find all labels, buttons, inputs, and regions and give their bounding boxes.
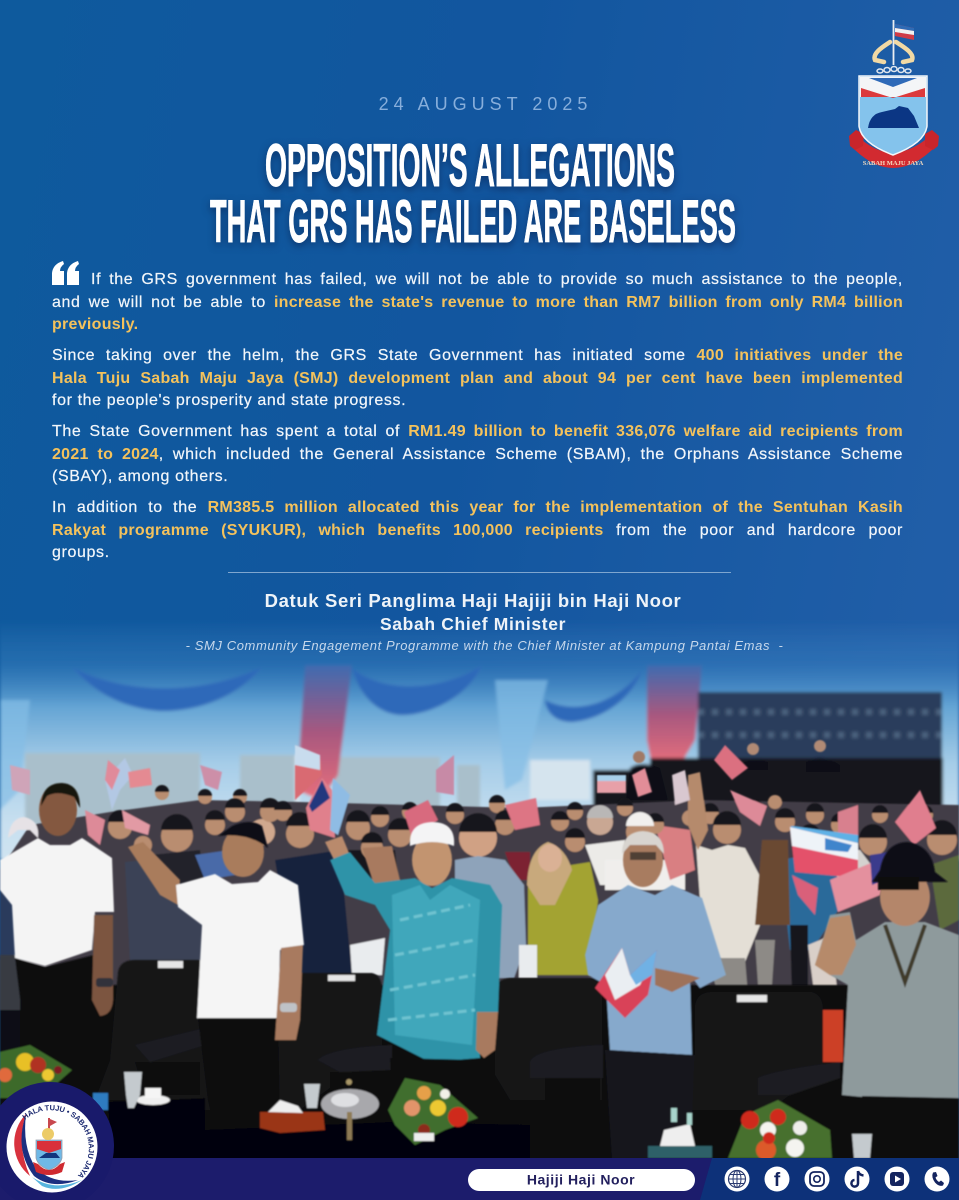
- silver food dish: [321, 1079, 379, 1140]
- icon: facebook: f: [774, 1170, 781, 1191]
- sofa armrests: [135, 1028, 840, 1095]
- stage performers: [626, 758, 840, 800]
- man at far left in white shirt: [0, 783, 114, 1065]
- icon: facebook: [764, 1166, 790, 1192]
- tissue box right: [648, 1108, 712, 1158]
- white tags on sofas: [158, 961, 767, 1002]
- quote body text: and we will not be able to increase the state's revenue to more than RM7 billion from only RM4 billion: [52, 294, 903, 311]
- quote body text: (SBAY), among others.: [52, 468, 228, 485]
- ribbon: SABAH MAJU JAYA: [863, 160, 924, 167]
- crowd clothing blocks: [0, 825, 959, 975]
- flag on pole: [893, 20, 914, 65]
- badge crest: [33, 1118, 65, 1175]
- wreath: [877, 66, 911, 73]
- quote body text: Hala Tuju Sabah Maju Jaya (SMJ) development plan and about 94 per cent have been implemented: [52, 370, 903, 387]
- Malaysian and Sabah flags: [10, 745, 936, 915]
- flower arrangement centre: [388, 1078, 478, 1145]
- crowd mass: [0, 800, 959, 1010]
- handle pill: Hajiji Haji Noor: [527, 1172, 635, 1188]
- badge: Hala Tuju Sabah Maju Jaya: [0, 1082, 114, 1192]
- saucer and cup: [136, 1088, 170, 1105]
- quote body text: [52, 271, 903, 561]
- Chief Minister in teal batik with white cap: [325, 822, 502, 1100]
- man in blue shirt holding flags: [585, 831, 726, 1158]
- badge: Hala Tuju Sabah Maju Jaya: HALA TUJU • SABAH MAJU JAYA: [22, 1105, 94, 1178]
- speaker position: Sabah Chief Minister: [380, 614, 566, 634]
- woman in white headscarf: [8, 817, 38, 838]
- black sofas: [95, 960, 823, 1110]
- photo: crowd waving flags at community programme: [0, 635, 959, 1158]
- quote body text: previously.: [52, 316, 138, 333]
- icon: tiktok: [844, 1166, 870, 1192]
- stage LED screen: [698, 692, 942, 760]
- state crest: [849, 20, 939, 168]
- badge ring text: [25, 1110, 89, 1177]
- blue drapes: [72, 665, 642, 722]
- quote body text: In addition to the RM385.5 million allocated this year for the implementation of the Sentuhan Kasih: [52, 499, 903, 516]
- curtains pink and pale: [297, 665, 352, 800]
- water glasses: [124, 1072, 872, 1158]
- grey building walls: [25, 753, 480, 825]
- handle pill: [468, 1169, 695, 1191]
- man at right with black hat and necklace: [815, 842, 959, 1158]
- event caption: - SMJ Community Engagement Programme with the Chief Minister at Kampung Pantai Emas -: [186, 638, 783, 653]
- quote body text: 2021 to 2024, which included the General Assistance Scheme (SBAM), the Orphans Assistance Scheme: [52, 446, 903, 463]
- tissue box: [260, 1100, 325, 1133]
- blue box: [93, 1093, 108, 1110]
- man behind in floral shirt with raised arm: [688, 772, 838, 1000]
- dark floor and tables base: [0, 985, 959, 1160]
- icon: website: [724, 1166, 750, 1192]
- icon: video: [884, 1166, 910, 1192]
- quote body text: groups.: [52, 544, 110, 561]
- black stage front: [593, 758, 943, 810]
- shield: [859, 76, 927, 155]
- footer bar: [0, 1158, 959, 1200]
- speaker name: Datuk Seri Panglima Haji Hajiji bin Haji Noor: [265, 590, 681, 611]
- flower arrangement left: [0, 1045, 72, 1098]
- arms holding the flag: [875, 42, 912, 62]
- icon: instagram: [804, 1166, 830, 1192]
- title: [208, 132, 739, 255]
- crowd hair: [108, 785, 957, 843]
- quote body text: The State Government has spent a total of RM1.49 billion to benefit 336,076 welfare aid recipients from: [52, 423, 903, 440]
- man with black cap in white shirt: [128, 822, 304, 1130]
- flower arrangement right: [728, 1100, 832, 1160]
- quote body text: If the GRS government has failed, we will not be able to provide so much assistance to the people,: [91, 271, 903, 288]
- ribbon: [849, 130, 939, 168]
- quote body text: Since taking over the helm, the GRS State Government has initiated some 400 initiatives under the: [52, 347, 903, 364]
- crowd heads: [108, 786, 957, 859]
- small table skirts: [108, 1098, 530, 1158]
- icon: quotation mark: [52, 261, 79, 285]
- badge swoosh: red, navy and blue crescents: [14, 1114, 82, 1189]
- icon: phone: [924, 1166, 950, 1192]
- woman in green dress: [527, 842, 598, 975]
- quote body text: for the people's prosperity and state progress.: [52, 392, 406, 409]
- date: 24 AUGUST 2025: [379, 94, 592, 114]
- tent roof backdrop: [0, 620, 959, 860]
- white plastic chairs: [350, 938, 537, 978]
- quote body text: Rakyat programme (SYUKUR), which benefits 100,000 recipients from the poor and hardcore poor: [52, 522, 903, 539]
- man behind in grey-blue shirt: [455, 856, 526, 978]
